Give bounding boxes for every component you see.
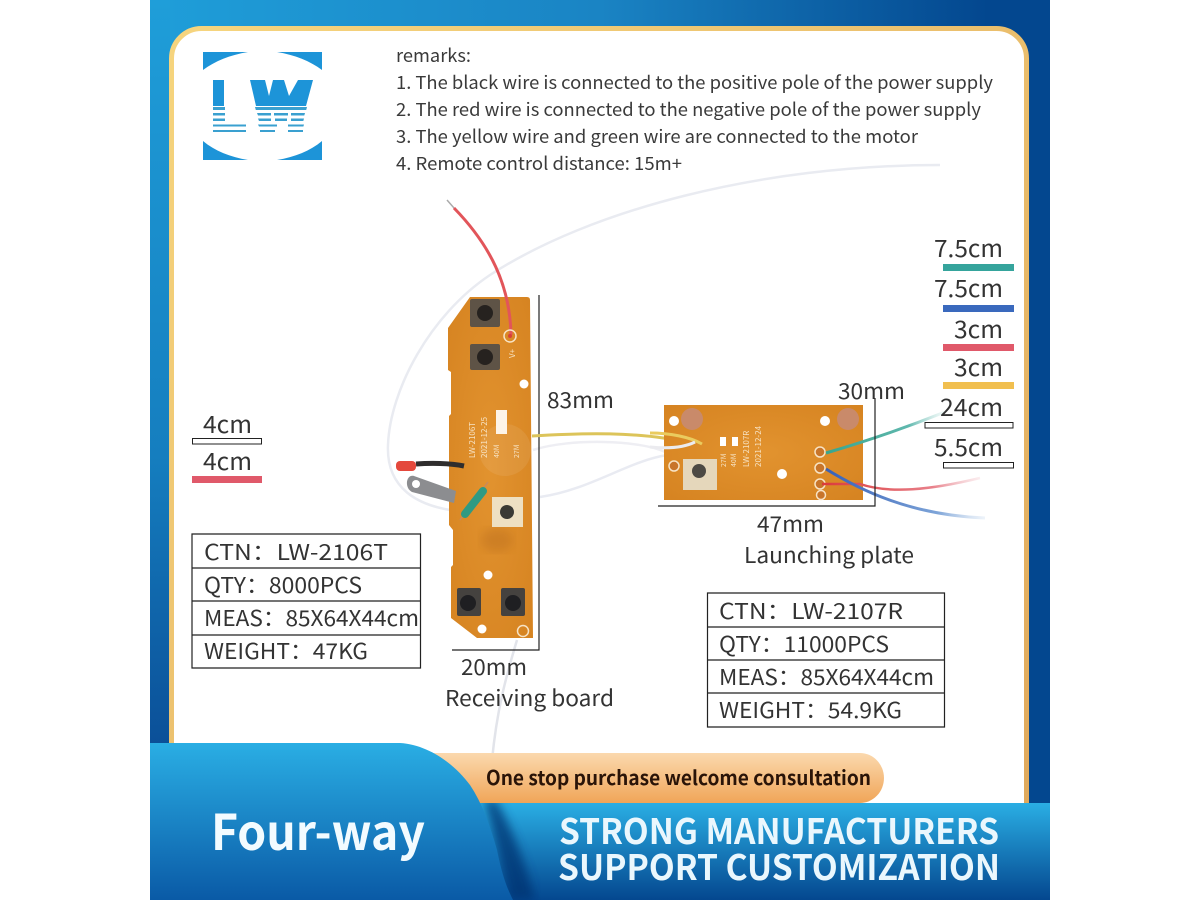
V+ solder pad and silk labels [467,330,528,636]
spec table: LW-2107R: MEAS：85X64X44cm [719,660,934,692]
board mounting holes [478,380,528,634]
footer tab: Four-way: Four-way [211,794,425,865]
remarks text block [396,42,994,176]
wire length legend: left: 4cm [203,442,252,477]
silk labels [719,425,764,467]
label: 30mm: 30mm [838,374,905,406]
spec table: LW-2107R [708,593,944,727]
push buttons [457,299,525,616]
silk labels: 27M [719,454,729,467]
spec table: LW-2107R: WEIGHT：54.9KG [719,693,902,725]
wire length legend: right [925,229,1014,468]
PCB body [664,405,863,500]
LED and black lead [396,461,464,471]
footer band: right [150,803,1050,900]
white antenna wires [388,165,940,760]
label: 20mm: 20mm [461,650,527,682]
launching plate dimension lines [658,398,875,506]
remarks text block: 3. The yellow wire and green wire are connected to the motor [396,123,919,149]
footer slogan: STRONG MANUFACTURERS [559,804,999,855]
silk labels: LW-2107R [741,431,752,467]
consultation pill: One stop purchase welcome consultation [486,762,871,791]
V+ solder pad and silk labels: LW-2106T [467,422,478,458]
label: Launching plate: Launching plate [744,538,914,570]
green inductor [460,482,488,520]
remarks text block: 2. The red wire is connected to the negative pole of the power supply [396,96,982,122]
yellow wire [532,434,690,443]
spec table: LW-2106T: MEAS：85X64X44cm [204,601,419,633]
receiving board [396,200,533,638]
V+ solder pad and silk labels: 27M [512,445,522,458]
logo: LW [203,52,322,160]
footer slogan: SUPPORT CUSTOMIZATION [558,840,1000,891]
remarks text block: 1. The black wire is connected to the positive pole of the power supply [396,69,994,95]
PCB body [448,297,533,638]
receiving board dimension lines [452,295,539,650]
spec table: LW-2106T: WEIGHT：47KG [204,634,368,666]
wire length legend: left [192,405,262,483]
wire length legend: left: 4cm [203,405,252,440]
spec table: LW-2107R: QTY：11000PCS [719,627,889,659]
board shading [479,424,531,552]
wire length legend: right: 7.5cm [934,269,1003,304]
spec table: LW-2106T: CTN：LW-2106T [204,535,388,567]
wire length legend: right: 3cm [954,348,1003,383]
blue background panel [150,0,1050,900]
spec table: LW-2106T: QTY：8000PCS [204,568,362,600]
LEDs and holes [669,408,859,479]
tuning coil [492,497,523,527]
coloured motor wires [822,412,985,518]
launching plate [650,405,985,518]
wire length legend: right: 7.5cm [934,229,1003,264]
solder pads [669,447,826,500]
V+ solder pad and silk labels: V+ [507,348,518,358]
V+ solder pad and silk labels: 40M [492,445,502,458]
potentiometer [683,459,717,490]
silk labels: 2021-12-24 [753,425,764,467]
spec table: LW-2106T [192,534,420,668]
wire length legend: right: 24cm [940,388,1003,423]
white card with gold border [172,28,1026,888]
label: Receiving board: Receiving board [445,681,614,713]
silk labels: 40M [729,454,739,467]
spec table: LW-2107R: CTN：LW-2107R [719,594,903,626]
footer slogan [558,804,1000,891]
red antenna wire [447,200,511,335]
V+ solder pad and silk labels: 2021-12-25 [479,417,490,458]
metal clip [407,476,456,503]
remarks text block: 4. Remote control distance: 15m+ [396,150,682,176]
footer tab: Four-way [150,743,535,900]
wire length legend: right: 3cm [954,310,1003,345]
yellow and white leads [650,433,702,448]
remarks text block: remarks: [396,42,471,68]
wire length legend: right: 5.5cm [934,428,1003,463]
consultation pill [430,753,884,803]
label: 83mm: 83mm [547,383,614,415]
label: 47mm: 47mm [757,507,824,539]
